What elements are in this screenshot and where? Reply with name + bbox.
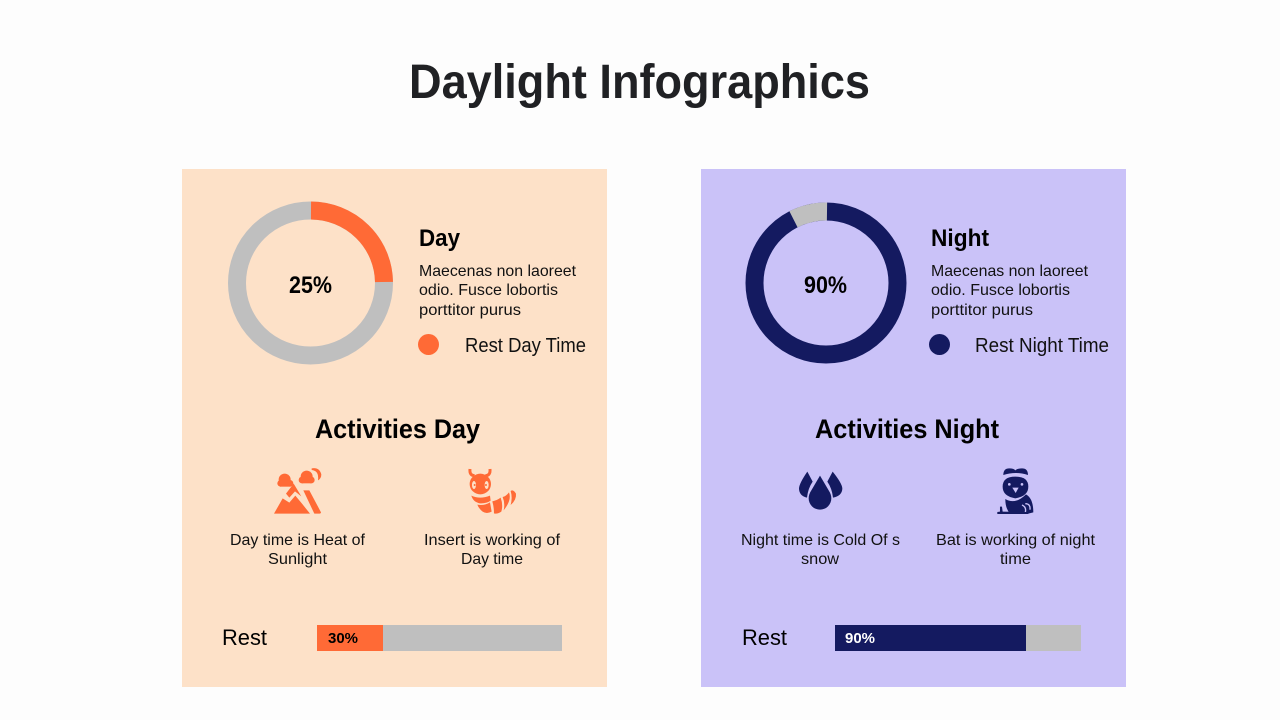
donut chart: night 90%: 90% xyxy=(804,272,847,299)
night panel background xyxy=(701,169,1126,687)
icon: volcano xyxy=(274,468,321,514)
rest label: Rest xyxy=(222,625,268,650)
donut chart: day 25%: 25% xyxy=(289,272,332,299)
caption: bat: Bat is working of night xyxy=(936,532,1096,549)
night description: odio. Fusce lobortis xyxy=(931,282,1070,299)
heading: day: Day xyxy=(419,225,461,252)
caption: day heat xyxy=(230,532,366,568)
caption: insect: Insert is working of xyxy=(424,532,561,549)
caption: insect xyxy=(424,532,561,568)
icon: worm xyxy=(470,469,516,514)
legend: rest day time: Rest Day Time xyxy=(465,335,586,357)
title: Daylight Infographics xyxy=(409,56,870,109)
donut chart: night 90% xyxy=(754,211,898,354)
day description: porttitor purus xyxy=(419,302,521,319)
caption: day heat: Day time is Heat of xyxy=(230,532,366,549)
day description: Maecenas non laoreet xyxy=(419,263,577,280)
panel: day xyxy=(182,169,607,687)
rest label: Rest xyxy=(742,625,788,650)
night description: Maecenas non laoreet xyxy=(931,263,1089,280)
legend: rest night time: Rest Night Time xyxy=(975,335,1109,357)
donut chart: day 25% xyxy=(237,210,384,356)
progress bar: 90% xyxy=(835,625,1081,651)
progress bar: 30%: 30% xyxy=(328,630,358,647)
night description: porttitor purus xyxy=(931,302,1033,319)
day description xyxy=(419,263,577,319)
legend: rest day time xyxy=(418,334,586,357)
heading: activities day: Activities Day xyxy=(315,414,480,444)
progress bar: 90%: 90% xyxy=(845,630,875,647)
legend: rest night time xyxy=(929,334,1109,357)
caption: night cold: Night time is Cold Of s xyxy=(741,532,900,549)
heading: activities night: Activities Night xyxy=(815,414,999,444)
caption: bat: time xyxy=(1000,551,1031,568)
icon: water drops xyxy=(799,472,842,510)
caption: day heat: Sunlight xyxy=(268,551,328,568)
progress bar: 30% xyxy=(317,625,562,651)
caption: night cold xyxy=(741,532,900,568)
icon: owl xyxy=(997,468,1033,514)
caption: night cold: snow xyxy=(801,551,839,568)
caption: bat xyxy=(936,532,1096,568)
night description xyxy=(931,263,1089,319)
panel: night xyxy=(701,169,1126,687)
day panel background xyxy=(182,169,607,687)
heading: night: Night xyxy=(931,225,989,252)
day description: odio. Fusce lobortis xyxy=(419,282,558,299)
caption: insect: Day time xyxy=(461,551,523,568)
